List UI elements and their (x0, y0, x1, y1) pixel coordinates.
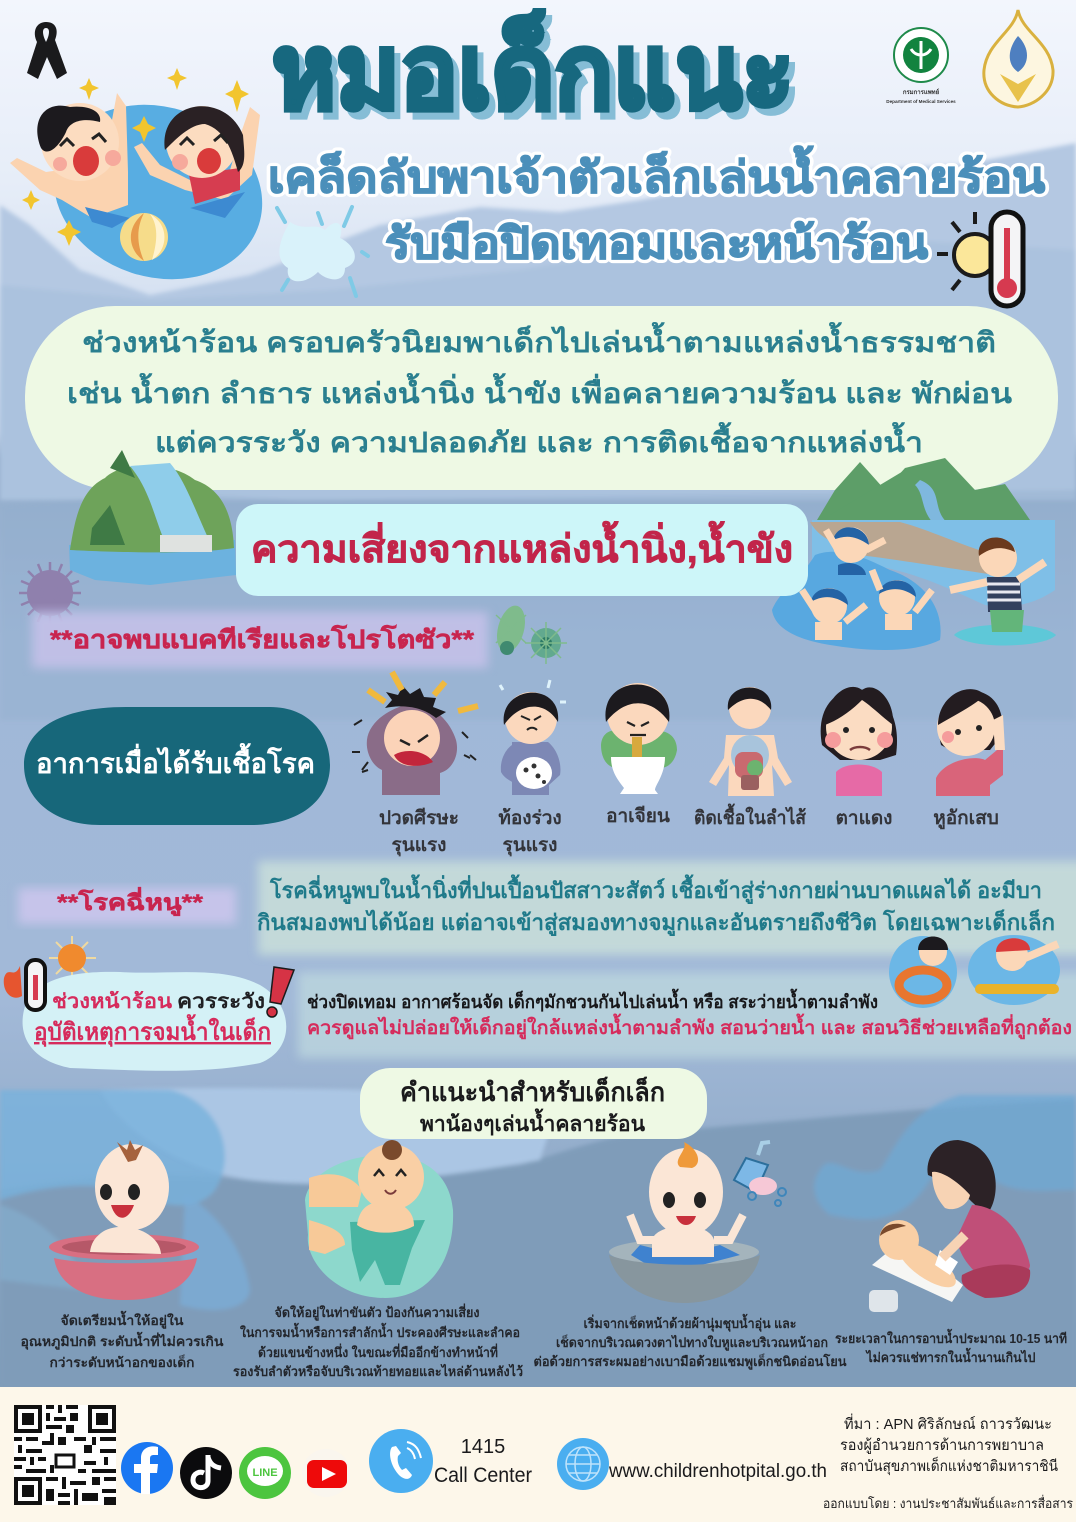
icon: baby shampoo bottle (734, 1142, 786, 1206)
banner: risk heading: ความเสี่ยงจากแหล่งน้ำนิ่ง,น้ำขัง (251, 521, 793, 571)
panel: drowning warning text: ช่วงปิดเทอม อากาศร้อนจัด เด็กๆมักชวนกันไปเล่นน้ำ หรือ สระว่ายน้ำตามลำพัง (307, 988, 878, 1012)
footer background (0, 1387, 1076, 1522)
icon: black mourning ribbon (27, 22, 67, 79)
pill: symptoms heading: อาการเมื่อได้รับเชื้อโรค (36, 742, 315, 779)
symptom: otitis (933, 689, 1005, 830)
step text: bath duration (835, 1328, 1067, 1365)
symptom: diarrhea: ท้องร่วง (498, 807, 562, 829)
callout: summer drowning warning: ช่วงหน้าร้อน (52, 990, 172, 1013)
symptom: vomiting (601, 683, 677, 827)
illustration: supporting baby in water (305, 1140, 453, 1298)
symptom: red eyes (821, 687, 897, 829)
icon: phone (369, 1429, 433, 1493)
illustration: children swimming (10, 68, 285, 306)
panel: intro: เช่น น้ำตก ลำธาร แหล่งน้ำนิ่ง น้ำขัง เพื่อคลายความร้อน และ พักผ่อน (67, 372, 1012, 409)
icon: exclamation mark (267, 967, 294, 1017)
source credit: รองผู้อำนวยการด้านการพยาบาล (840, 1437, 1044, 1454)
subtitle (268, 145, 1046, 268)
subtitle: รับมือปิดเทอมและหน้าร้อน (385, 220, 929, 268)
icon: swimming child (968, 935, 1060, 1005)
symptom: severe headache (352, 672, 478, 857)
step text: bath duration: ระยะเวลาในการอาบน้ำประมาณ 10-15 นาที (835, 1328, 1067, 1346)
callout: leptospirosis heading (18, 886, 236, 924)
subtitle: เคล็ดลับพาเจ้าตัวเล็กเล่นน้ำคลายร้อน (268, 145, 1046, 202)
banner: risk heading (236, 504, 808, 596)
illustration: mother changing baby (869, 1140, 1030, 1312)
source credit: ที่มา : APN ศิริลักษณ์ ถาวรวัฒนะ (844, 1413, 1052, 1433)
logo: ministry of public health: Department of Medical Services (886, 99, 956, 104)
panel: drowning warning text (298, 972, 1076, 1058)
symptom: severe headache: รุนแรง (392, 835, 446, 857)
pill: advice heading (360, 1068, 707, 1139)
symptom: severe headache: ปวดศีรษะ (379, 807, 459, 829)
icon: line (239, 1447, 291, 1499)
panel: drowning warning text: ควรดูแลไม่ปล่อยให้เด็กอยู่ใกล้แหล่งน้ำตามลำพัง สอนว่ายน้ำ และ สอนวิธีช่วยเหลือที่ถูกต้อง (307, 1013, 1072, 1040)
icon: tiktok (180, 1447, 232, 1499)
call center text: Call Center (434, 1464, 532, 1487)
icon: thermometer with flame (4, 960, 45, 1010)
call center text: 1415 (461, 1436, 505, 1458)
symptom: vomiting: อาเจียน (606, 805, 670, 827)
QR code (14, 1405, 116, 1505)
symptom: intestinal infection (694, 687, 806, 829)
step text: water temperature: อุณหภูมิปกติ ระดับน้ำที่ไม่ควรเกิน (20, 1331, 224, 1350)
icon: bacteria (492, 602, 567, 664)
title: หมอเด็กแนะ (272, 9, 794, 131)
step text: holding position: ด้วยแขนข้างหนึ่ง ในขณะที่มืออีกข้างทำหน้าที่ (258, 1343, 498, 1360)
step text: holding position: รองรับลำตัวหรือจับบริเวณท้ายทอยและไหล่ด้านหลังไว้ (233, 1363, 523, 1379)
callout: summer drowning warning: อุบัติเหตุการจมน้ำในเด็ก (34, 1013, 271, 1048)
illustration: baby face washing (609, 1142, 760, 1303)
icon: facebook (121, 1442, 173, 1494)
icon: hot sun (49, 936, 96, 982)
icon: youtube (302, 1449, 350, 1497)
logo: ministry of public health (886, 28, 956, 104)
logo: ministry of public health: กรมการแพทย์ (903, 88, 940, 96)
subtitle: รับมือปิดเทอมและหน้าร้อน (385, 220, 929, 268)
illustration: baby in pink tub (49, 1140, 199, 1300)
callout: bacteria and protozoa: **อาจพบแบคทีเรียและโปรโตซัว** (50, 624, 474, 654)
icon: globe (557, 1438, 609, 1490)
icon: line: LINE (252, 1467, 278, 1479)
illustration: waterfall (69, 450, 236, 585)
illustration: children in river (772, 458, 1056, 650)
symptom: diarrhea (498, 680, 566, 857)
step text: holding position: ในการจมน้ำหรือการสำลักน้ำ ประคองศีรษะและลำคอ (240, 1322, 520, 1340)
panel: intro: แต่ควรระวัง ความปลอดภัย และ การติดเชื้อจากแหล่งน้ำ (155, 421, 923, 458)
panel: leptospirosis text (257, 861, 1076, 955)
step text: holding position (233, 1303, 523, 1379)
title: หมอเด็กแนะ (278, 16, 800, 138)
website text: www.childrenhotpital.go.th (608, 1461, 827, 1482)
step text: washing order (534, 1313, 847, 1370)
call center text (434, 1436, 532, 1487)
step text: washing order: เริ่มจากเช็ดหน้าด้วยผ้านุ่มชุบน้ำอุ่น และ (584, 1313, 797, 1332)
panel: intro (25, 306, 1058, 490)
pill: symptoms heading (24, 707, 330, 825)
step text: washing order: ต่อด้วยการสระผมอย่างเบามือด้วยแชมพูเด็กชนิดอ่อนโยน (534, 1352, 847, 1370)
icon: children in swim ring (889, 936, 957, 1008)
icon: sun and thermometer (937, 212, 1023, 306)
source credit (840, 1413, 1058, 1476)
step text: water temperature: จัดเตรียมน้ำให้อยู่ใน (60, 1310, 184, 1329)
icon: water splash (277, 207, 368, 296)
panel: leptospirosis text: โรคฉี่หนูพบในน้ำนิ่งที่ปนเปื้อนปัสสาวะสัตว์ เชื้อเข้าสู่ร่างกายผ่านบาดแผลได้ อะมีบา (269, 874, 1042, 905)
icon: virus (19, 562, 81, 624)
callout: bacteria and protozoa (32, 612, 488, 668)
step text: washing order: เช็ดจากบริเวณดวงตาไปทางใบหูและบริเวณหน้าอก (556, 1333, 828, 1351)
panel: leptospirosis text: กินสมองพบได้น้อย แต่อาจเข้าสู่สมองทางจมูกและอันตรายถึงชีวิต โดยเฉพาะเด็กเล็ก (257, 908, 1055, 937)
symptom: intestinal infection: ติดเชื้อในลำไส้ (694, 803, 806, 829)
panel: intro: ช่วงหน้าร้อน ครอบครัวนิยมพาเด็กไปเล่นน้ำตามแหล่งน้ำธรรมชาติ (82, 321, 996, 358)
step text: water temperature: กว่าระดับหน้าอกของเด็ก (50, 1353, 195, 1370)
callout: summer drowning warning: ควรระวัง (177, 991, 265, 1013)
pill: advice heading: พาน้องๆเล่นน้ำคลายร้อน (420, 1108, 646, 1136)
logo: queen sirikit institute emblem (984, 10, 1053, 107)
step text: holding position: จัดให้อยู่ในท่าขันตัว ป้องกันความเสี่ยง (274, 1303, 480, 1321)
subtitle: เคล็ดลับพาเจ้าตัวเล็กเล่นน้ำคลายร้อน (268, 145, 1046, 202)
step text: water temperature (20, 1310, 224, 1370)
pill: advice heading: คำแนะนำสำหรับเด็กเล็ก (400, 1076, 665, 1107)
callout: leptospirosis heading: **โรคฉี่หนู** (57, 886, 204, 917)
source credit: สถาบันสุขภาพเด็กแห่งชาติมหาราชินี (840, 1456, 1058, 1476)
step text: bath duration: ไม่ควรแช่ทารกในน้ำนานเกินไป (865, 1347, 1036, 1365)
symptom: red eyes: ตาแดง (836, 808, 892, 829)
symptom: diarrhea: รุนแรง (503, 835, 557, 857)
symptom: otitis: หูอักเสบ (933, 808, 999, 830)
callout: summer drowning warning (23, 972, 286, 1071)
